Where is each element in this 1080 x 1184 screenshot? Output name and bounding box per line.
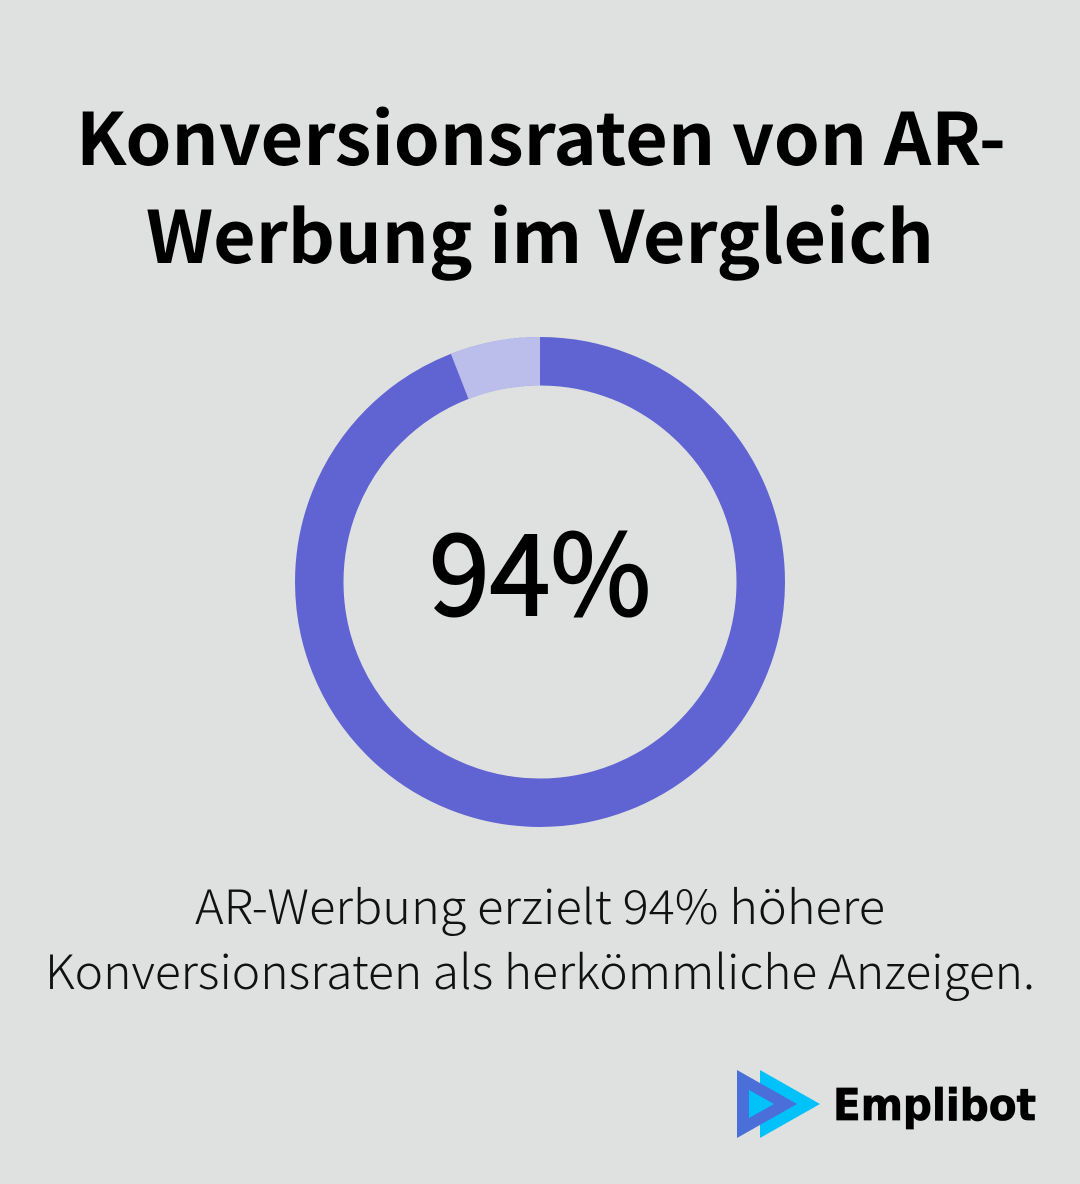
title — [76, 81, 1006, 284]
logo: Emplibot — [737, 1070, 1036, 1138]
description text: AR-Werbung erzielt 94% höhere — [195, 869, 885, 938]
description text: Konversionsraten als herkömmliche Anzeigen. — [45, 934, 1035, 1003]
title: Werbung im Vergleich — [146, 179, 934, 284]
donut chart: 94% — [319, 361, 761, 803]
description text — [45, 869, 1035, 1003]
title: Konversionsraten von AR- — [76, 81, 1006, 186]
wordmark: Emplibot — [833, 1080, 1036, 1131]
value: 94%: 94% — [429, 486, 651, 648]
icon: play triangles — [737, 1070, 820, 1138]
remaining segment — [460, 361, 540, 376]
